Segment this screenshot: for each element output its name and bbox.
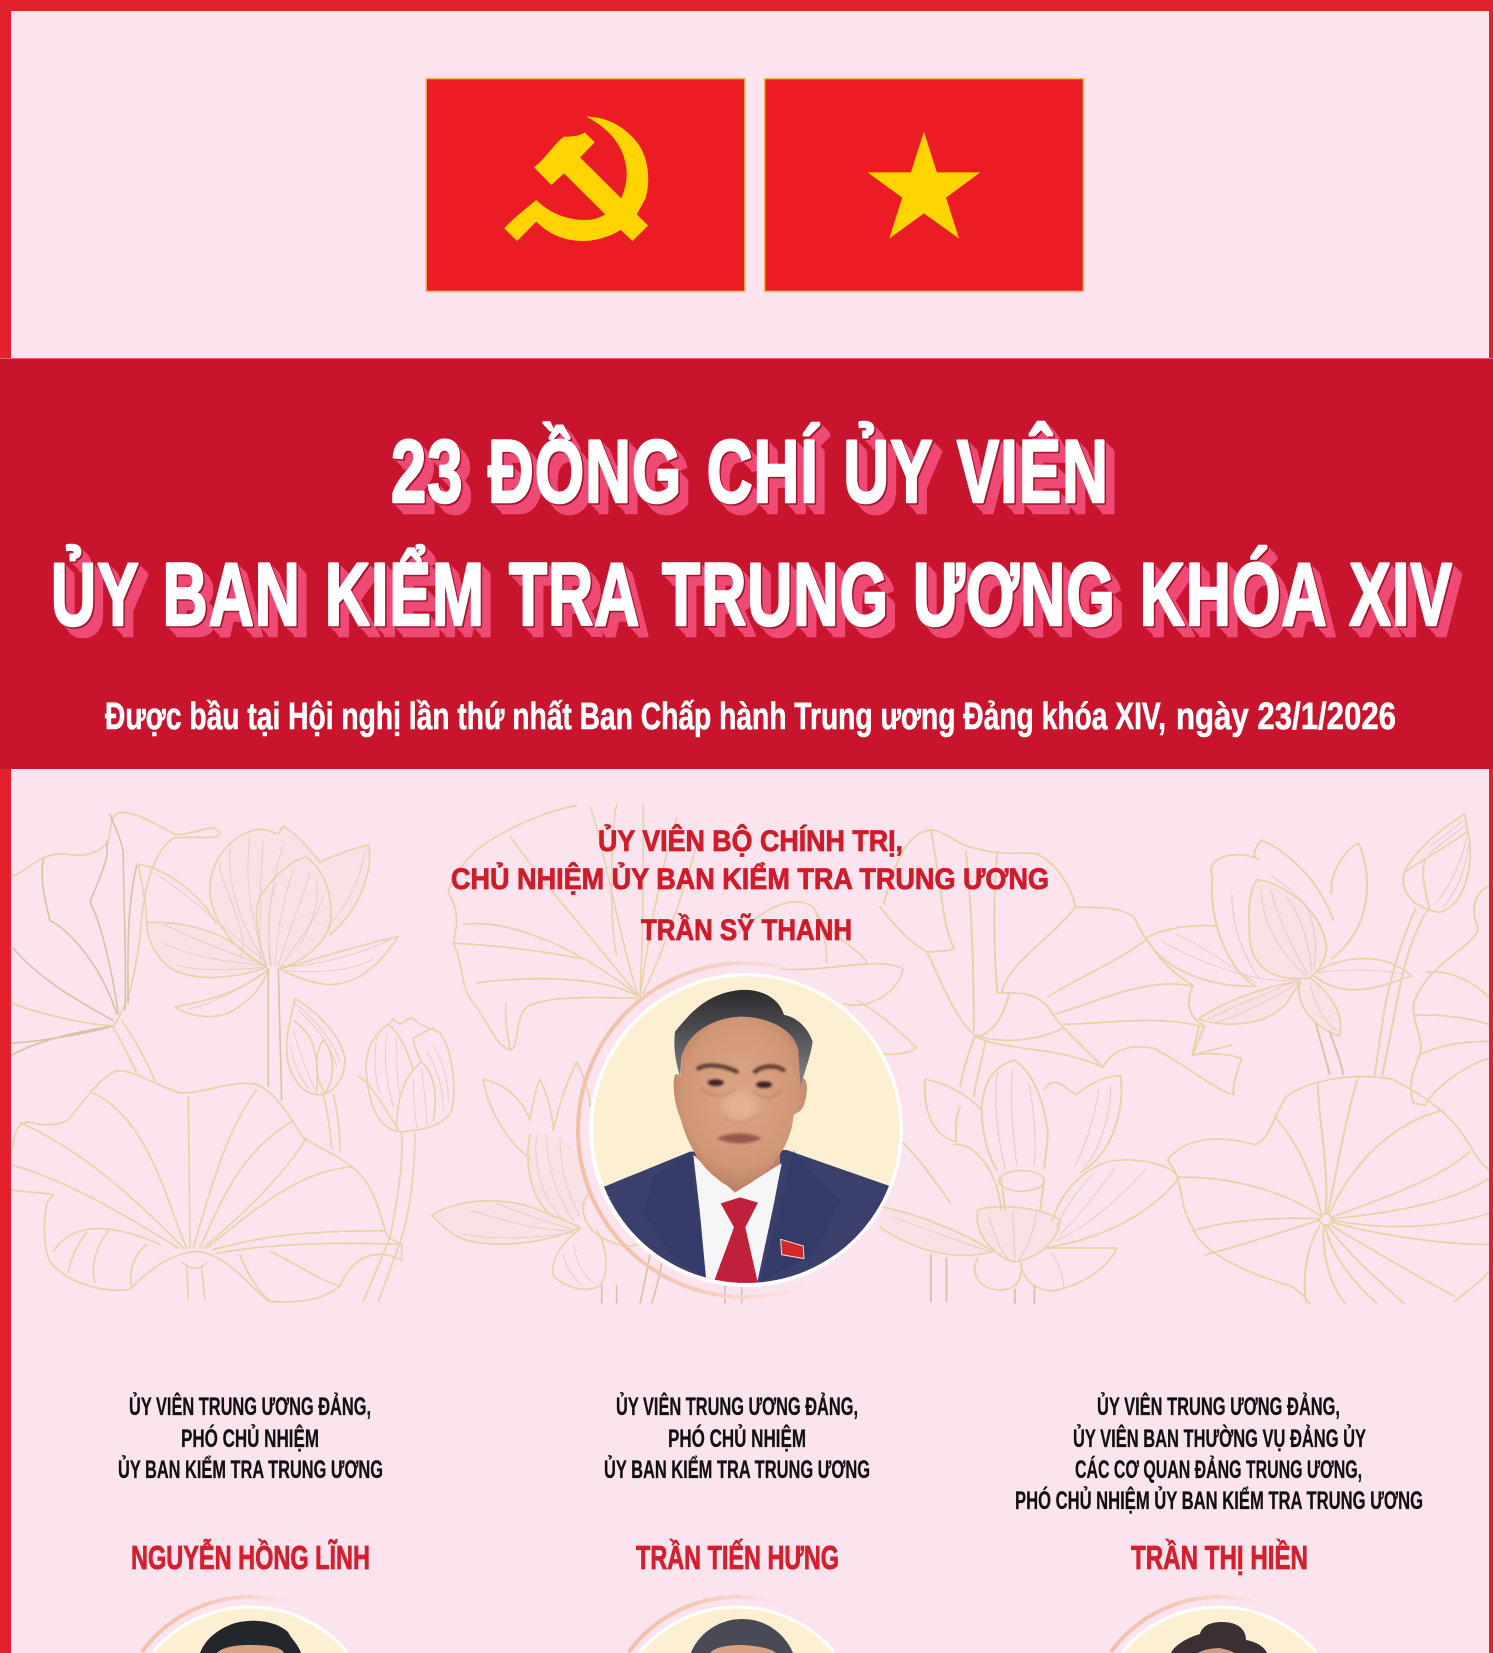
flag: Vietnam — [764, 78, 1084, 292]
lapel pin — [781, 1239, 804, 1259]
name: TRẦN TIẾN HƯNG — [636, 1539, 839, 1576]
role text: ỦY BAN KIỂM TRA TRUNG ƯƠNG — [118, 1454, 383, 1484]
deputy 1 — [118, 1391, 383, 1653]
deputy 2 — [604, 1391, 870, 1653]
facial features — [698, 1065, 783, 1143]
subtitle: Được bầu tại Hội nghị lần thứ nhất Ban Chấp hành Trung ương Đảng khóa XIV, — [105, 696, 1166, 738]
role text — [604, 1391, 870, 1484]
portrait — [629, 1597, 845, 1653]
portrait — [142, 1597, 358, 1653]
title banner — [0, 358, 1493, 769]
section heading: chairman — [451, 824, 1049, 947]
role text: ỦY VIÊN TRUNG ƯƠNG ĐẢNG, — [616, 1391, 858, 1421]
role text: PHÓ CHỦ NHIỆM — [668, 1423, 806, 1453]
name: NGUYỄN HỒNG LĨNH — [131, 1539, 370, 1576]
section heading: chairman: ỦY VIÊN BỘ CHÍNH TRỊ, — [598, 824, 903, 858]
flag: Communist Party — [426, 78, 745, 292]
neck and face — [695, 1154, 780, 1192]
role text: PHÓ CHỦ NHIỆM — [181, 1423, 319, 1453]
lotus group: left — [12, 812, 454, 1302]
subtitle: ngày 23/1/2026 — [1176, 696, 1396, 738]
jacket — [604, 1150, 889, 1283]
role text: ỦY VIÊN TRUNG ƯƠNG ĐẢNG, — [129, 1391, 371, 1421]
icon: gold star — [868, 132, 980, 239]
role text: ỦY BAN KIỂM TRA TRUNG ƯƠNG — [604, 1454, 870, 1484]
tie — [713, 1197, 758, 1285]
deputy 3 — [1015, 1391, 1423, 1653]
role text — [118, 1391, 383, 1484]
flags — [426, 78, 1084, 292]
title — [51, 421, 1453, 644]
lotus group: right — [880, 814, 1488, 1303]
title: 23 ĐỒNG CHÍ ỦY VIÊN — [391, 421, 1109, 521]
hair — [674, 990, 813, 1088]
role text — [1015, 1391, 1423, 1515]
portrait — [1111, 1597, 1327, 1653]
icon: hammer and sickle — [504, 117, 648, 241]
shirt — [693, 1155, 782, 1285]
name: Trần Sỹ Thanh: TRẦN SỸ THANH — [641, 913, 852, 947]
portrait: Trần Sỹ Thanh — [578, 963, 912, 1297]
section heading: chairman: CHỦ NHIỆM ỦY BAN KIỂM TRA TRUNG ƯƠNG — [451, 862, 1049, 896]
lotus line-art background — [12, 804, 1488, 1303]
role text: ỦY VIÊN TRUNG ƯƠNG ĐẢNG, — [1097, 1391, 1340, 1421]
name: TRẦN THỊ HIỀN — [1131, 1539, 1308, 1576]
lotus group: centre — [432, 804, 917, 1303]
